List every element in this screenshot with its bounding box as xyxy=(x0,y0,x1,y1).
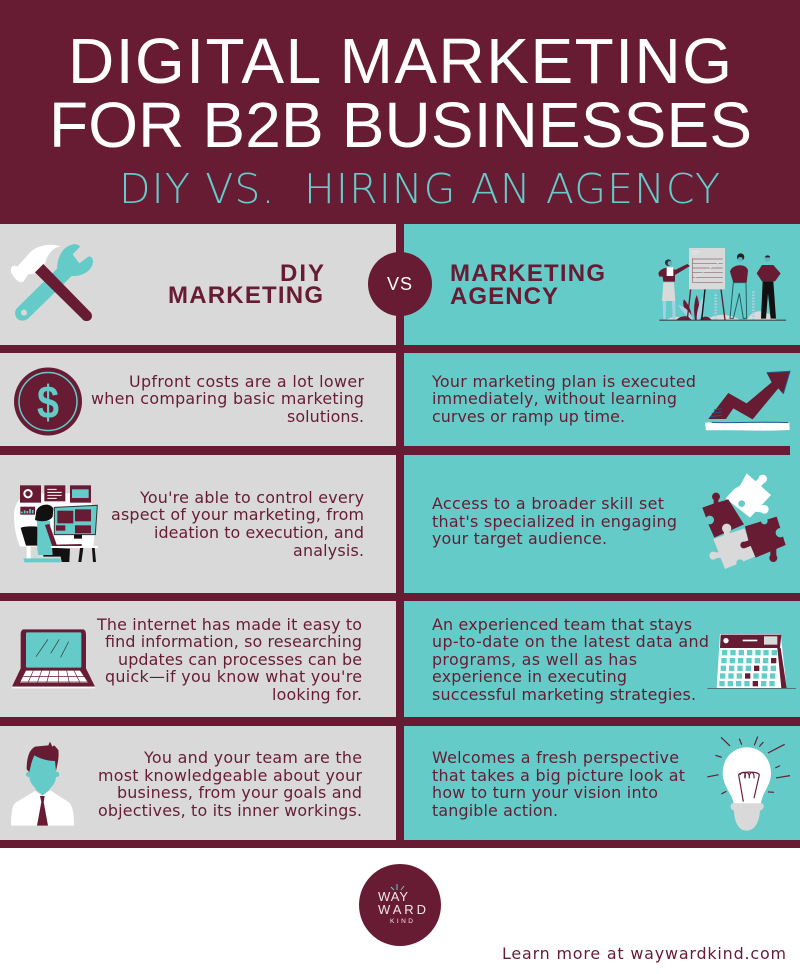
panel: team knowledge xyxy=(0,726,396,840)
text xyxy=(111,488,364,560)
icon: puzzle pieces xyxy=(702,473,786,569)
text: updates can processes can be xyxy=(118,650,362,669)
text xyxy=(98,748,362,820)
panel: lower upfront costs xyxy=(0,353,396,446)
text: curves or ramp up time. xyxy=(432,407,625,426)
icon: light bulb xyxy=(707,737,790,831)
text: successful marketing strategies. xyxy=(432,685,696,704)
panel: finding information xyxy=(0,601,396,717)
heading: Marketing Agency: MARKETING xyxy=(450,260,605,287)
logo: Wayward Kind: WAY xyxy=(378,889,408,904)
text: solutions. xyxy=(287,407,364,426)
panel: control every aspect xyxy=(0,455,396,593)
text: how to turn your vision into xyxy=(432,783,658,802)
puzzle piece: white xyxy=(726,473,771,518)
VS badge xyxy=(368,252,432,316)
text: immediately, without learning xyxy=(432,389,677,408)
text: experience in executing xyxy=(432,667,627,686)
text: your target audience. xyxy=(432,529,607,548)
text: looking for. xyxy=(272,685,362,704)
text xyxy=(431,372,696,426)
icon: dollar coin xyxy=(14,368,82,436)
text: You and your team are the xyxy=(143,748,362,767)
logo: Wayward Kind: WARD xyxy=(378,902,426,917)
text xyxy=(432,748,685,820)
text xyxy=(432,615,709,704)
text: objectives, to its inner workings. xyxy=(98,801,362,820)
text xyxy=(432,494,677,548)
text: business, from your goals and xyxy=(117,783,362,802)
panel: DIY heading xyxy=(0,224,396,345)
icon: calendar xyxy=(707,634,796,689)
text: programs, as well as has xyxy=(432,650,637,669)
panel: executed immediately xyxy=(404,353,800,455)
website link text: Learn more at waywardkind.com xyxy=(502,944,786,963)
puzzle piece: maroon left xyxy=(702,493,744,538)
text: Welcomes a fresh perspective xyxy=(432,748,679,767)
figure: man with hands on hips xyxy=(757,255,781,319)
panel: broader skill set xyxy=(404,455,800,593)
text: when comparing basic marketing xyxy=(91,389,364,408)
text: most knowledgeable about your xyxy=(98,766,362,785)
text xyxy=(96,615,362,704)
text: that's specialized in engaging xyxy=(432,512,677,531)
heading: DIY Marketing: DIY xyxy=(280,260,324,287)
figure: man with crossed arms xyxy=(730,253,748,318)
icon: dollar coin: $ xyxy=(37,376,59,428)
footer xyxy=(0,848,800,974)
text: Upfront costs are a lot lower xyxy=(129,372,364,391)
heading: DIY Marketing xyxy=(168,260,324,309)
text: Your marketing plan is executed xyxy=(431,372,696,391)
text: analysis. xyxy=(293,541,364,560)
text: The internet has made it easy to xyxy=(96,615,362,634)
text: tangible action. xyxy=(432,801,558,820)
icon: businessman xyxy=(11,742,74,826)
icon: laptop xyxy=(12,629,95,688)
text: ideation to execution, and xyxy=(154,523,364,542)
text xyxy=(91,372,364,426)
title xyxy=(49,25,752,161)
VS badge: VS xyxy=(387,274,413,294)
subtitle: DIY VS. HIRING AN AGENCY xyxy=(119,165,720,213)
text: You're able to control every xyxy=(139,488,364,507)
icon: rising arrow xyxy=(705,371,790,431)
text: find information, so researching xyxy=(105,632,362,651)
text: that takes a big picture look at xyxy=(432,766,685,785)
maroon bar segment xyxy=(404,446,790,455)
puzzle piece: maroon right xyxy=(740,517,786,562)
text: An experienced team that stays xyxy=(432,615,692,634)
icon: hammer and wrench xyxy=(11,244,93,321)
logo: Wayward Kind: KIND xyxy=(390,918,413,925)
title: DIGITAL MARKETING xyxy=(68,25,732,97)
panel: fresh perspective xyxy=(404,726,800,840)
text: aspect of your marketing, from xyxy=(111,505,364,524)
panel: experienced team xyxy=(404,601,800,717)
heading: Marketing Agency: AGENCY xyxy=(450,283,558,310)
puzzle piece: grey xyxy=(709,524,755,569)
figure: woman presenting xyxy=(658,259,690,319)
title: FOR B2B BUSINESSES xyxy=(49,89,752,161)
icon: person at computer xyxy=(14,485,98,562)
panel: Marketing Agency heading xyxy=(404,224,800,345)
text: up-to-date on the latest data and xyxy=(432,632,709,651)
heading: Marketing Agency xyxy=(450,260,605,310)
icon: team presenting at a flip chart xyxy=(658,248,786,321)
text: Access to a broader skill set xyxy=(432,494,664,513)
text: quick—if you know what you're xyxy=(105,667,362,686)
heading: DIY Marketing: MARKETING xyxy=(168,282,323,309)
logo: Wayward Kind xyxy=(359,864,441,946)
